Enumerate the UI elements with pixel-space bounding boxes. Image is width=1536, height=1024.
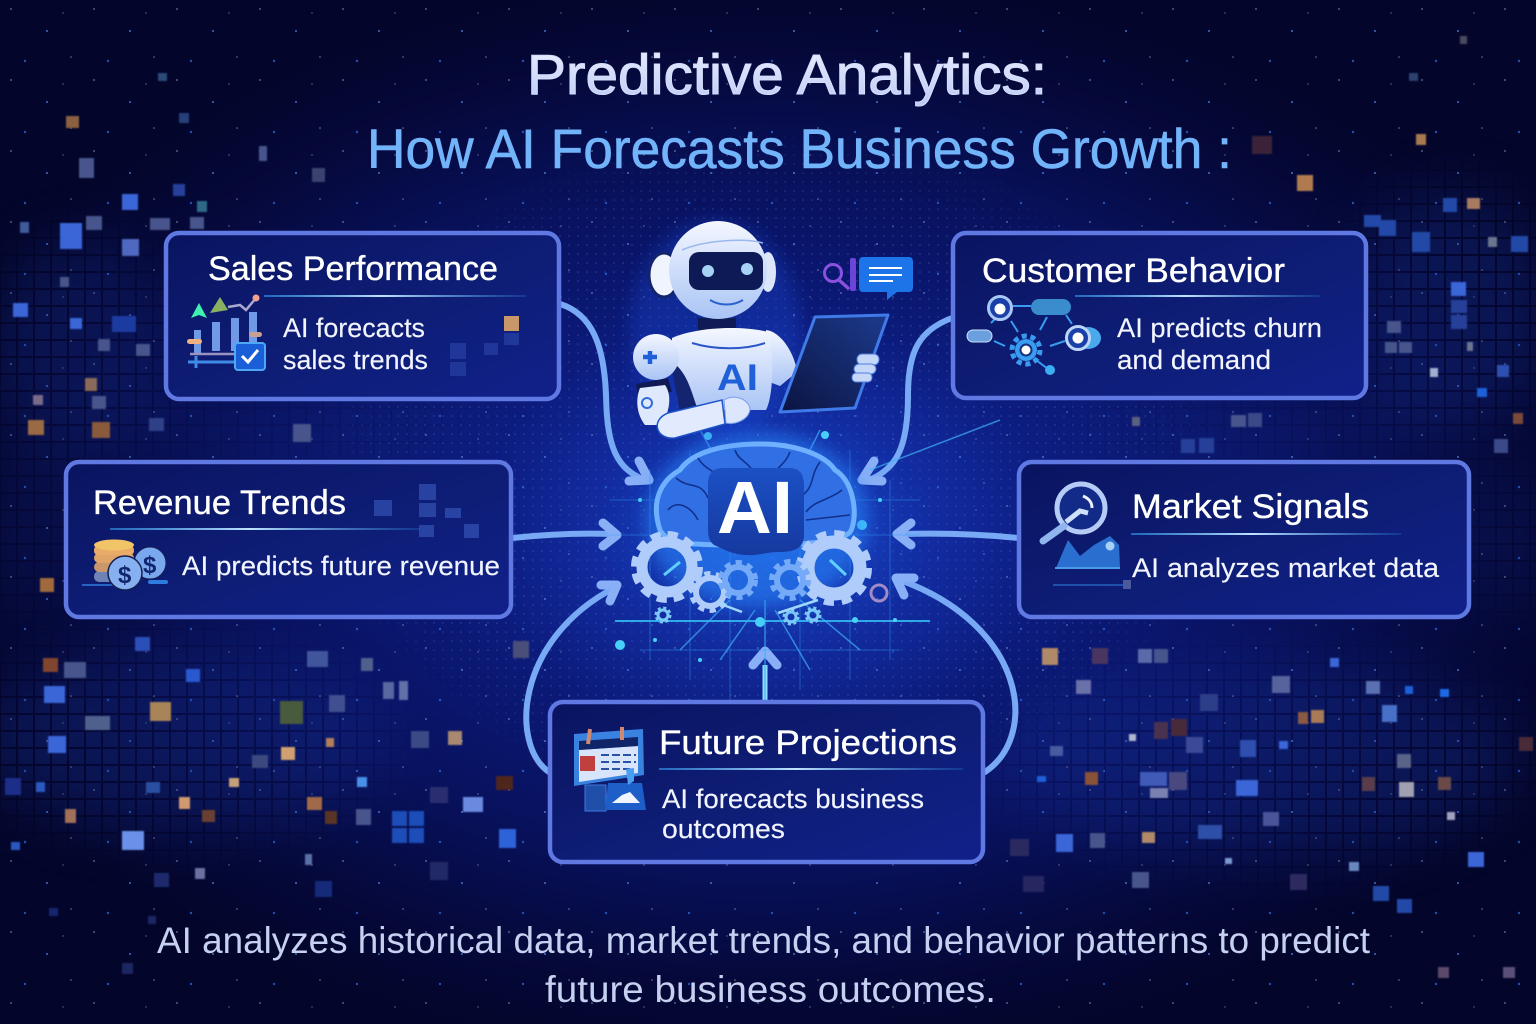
- forearm: [637, 385, 669, 425]
- panel: sales performance: [166, 233, 559, 399]
- connector arrows: [512, 304, 1018, 772]
- heading: Revenue Trends: [93, 484, 346, 522]
- text: [283, 313, 428, 375]
- panel: future projections: [550, 702, 983, 862]
- arrow: sales to AI: [560, 304, 649, 481]
- text: [662, 784, 924, 844]
- caption: [157, 920, 1371, 1010]
- AI brain: [635, 432, 887, 624]
- brow: [682, 240, 763, 250]
- arrow: future projections left: [526, 585, 617, 772]
- text: AI analyzes market data: [1132, 553, 1440, 583]
- dark torso side: [672, 350, 702, 412]
- text: AI predicts churn: [1117, 313, 1322, 343]
- arrow: market to AI: [897, 523, 1018, 545]
- heading: Market Signals: [1132, 488, 1369, 526]
- AI badge: AI: [717, 466, 793, 549]
- tablet: [780, 315, 888, 412]
- title line 2: How AI Forecasts Business Growth :: [367, 117, 1232, 180]
- text: outcomes: [662, 814, 785, 844]
- orange squares: [28, 116, 1533, 843]
- AI core network lines: [610, 420, 1000, 700]
- eyes: [702, 265, 714, 277]
- icon: calendar: [574, 727, 646, 811]
- arrow: revenue to AI: [512, 523, 617, 546]
- icon: network: [967, 296, 1101, 375]
- torso: [672, 328, 772, 410]
- smile: [710, 300, 743, 304]
- panel: revenue trends: [66, 462, 511, 617]
- icon: coins: $: [118, 562, 132, 589]
- chest AI: AI: [717, 357, 758, 398]
- arrow: customer to AI: [862, 318, 952, 481]
- arrow: future projections right: [896, 578, 1015, 772]
- robot: [630, 220, 888, 440]
- card inner pixels: [374, 484, 479, 538]
- title line 1: Predictive Analytics:: [527, 43, 1047, 107]
- icon: coins: $: [143, 552, 157, 579]
- robot hand on tablet: [852, 354, 879, 382]
- node ring: [871, 585, 887, 601]
- panel: market signals: [1019, 462, 1469, 617]
- text: AI forecacts: [283, 313, 425, 343]
- ears: [649, 253, 679, 297]
- text: AI forecacts business: [662, 784, 924, 814]
- text: AI predicts future revenue: [182, 551, 500, 581]
- text: sales trends: [283, 345, 428, 375]
- visor: [689, 252, 763, 290]
- text: and demand: [1117, 345, 1271, 375]
- text: [1117, 313, 1322, 375]
- heading: Future Projections: [659, 724, 957, 762]
- gears: [635, 534, 868, 624]
- robot halo: [630, 220, 800, 440]
- right arm: [764, 330, 797, 386]
- caption: future business outcomes.: [545, 969, 996, 1010]
- elbow band: [636, 378, 672, 396]
- heading: Sales Performance: [208, 250, 498, 288]
- panel: customer behavior: [953, 233, 1366, 398]
- shoulder: [633, 334, 679, 380]
- brain shape: [656, 444, 854, 545]
- caption: AI analyzes historical data, market trends, and behavior patterns to predict: [157, 920, 1371, 961]
- title: [367, 43, 1232, 180]
- icon: coins: [82, 540, 166, 590]
- lower arm: [657, 400, 725, 438]
- card inner pixels: [450, 333, 519, 376]
- heading: Customer Behavior: [982, 252, 1285, 290]
- icon: magnifier and mountains: [1043, 484, 1131, 589]
- head: [669, 221, 767, 319]
- neck: [698, 318, 736, 332]
- bright blue squares: [13, 184, 1528, 913]
- icon: chart: [187, 294, 265, 370]
- olive square: [280, 701, 303, 724]
- brain glow: [645, 432, 869, 608]
- arrow: future projections up: [753, 651, 777, 700]
- icon: search and chat bubble: [824, 257, 913, 300]
